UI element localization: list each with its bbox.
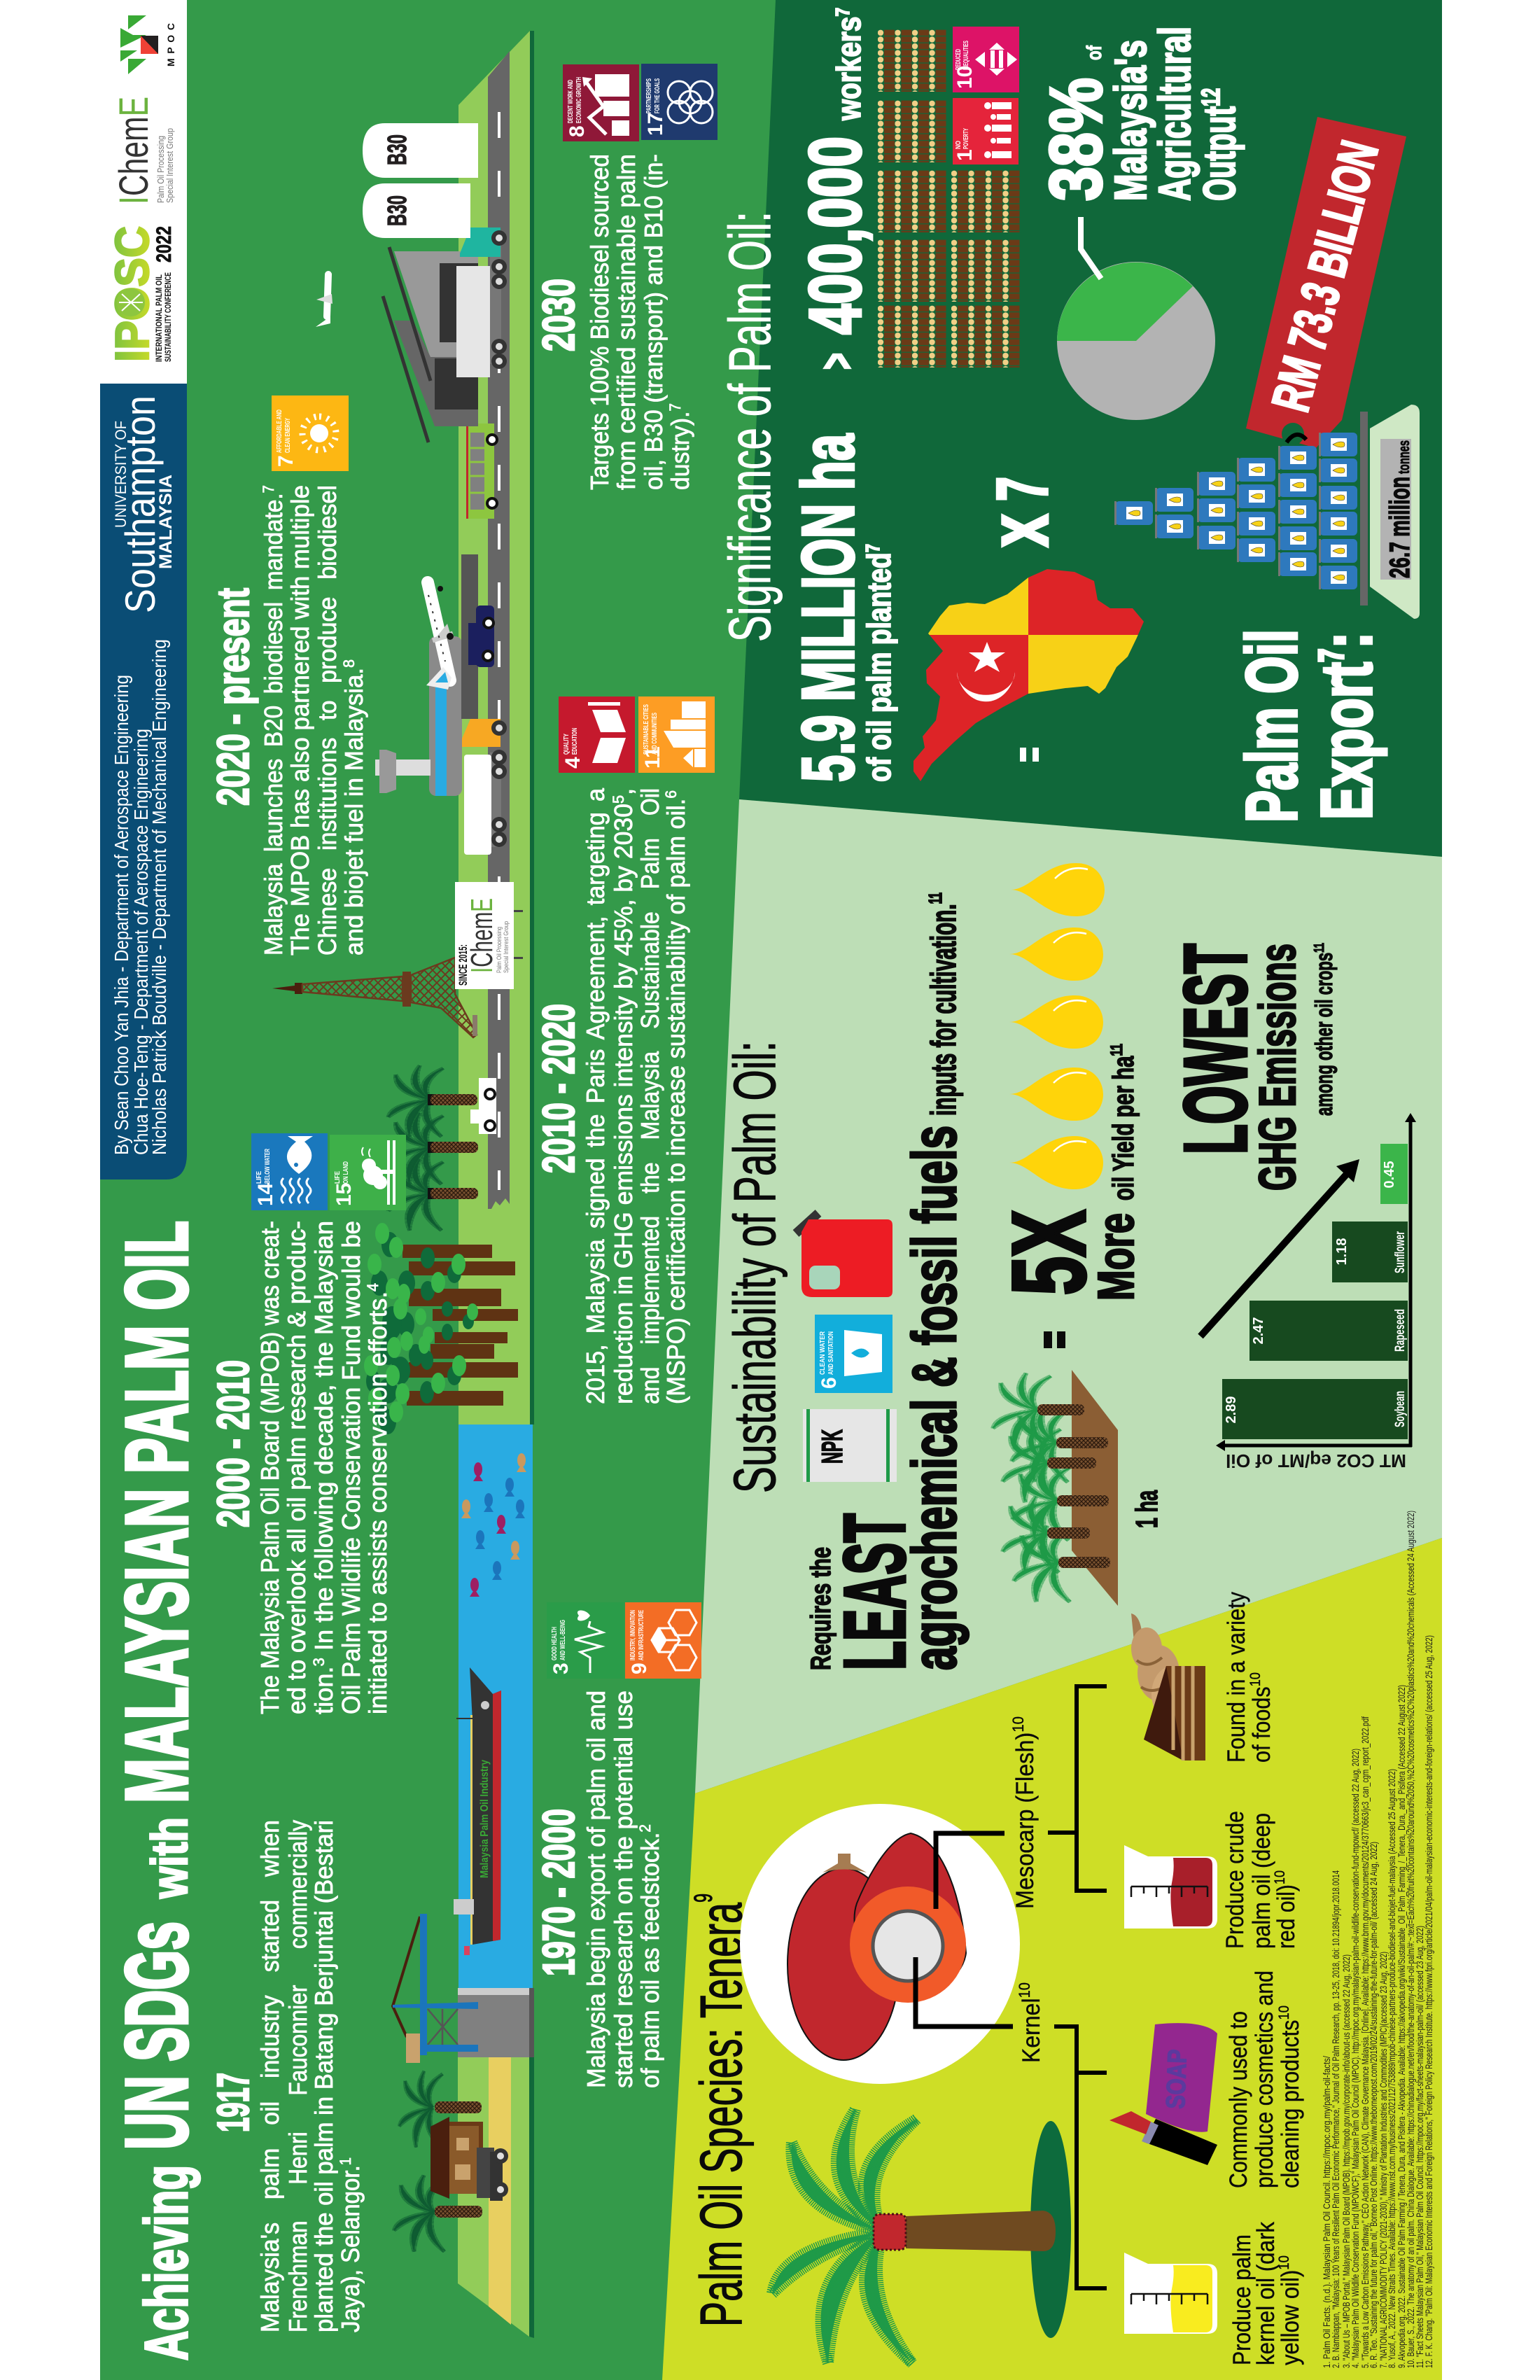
logo: IChemE: Special Interest Group (164, 128, 175, 203)
callout: price tag (1246, 117, 1406, 448)
chart: GHG emissions bar chart: Soybean (1393, 1391, 1408, 1427)
text: 1917 timeline entry: 1 (337, 2157, 354, 2165)
logo: IPOSC: SUSTAINABILITY CONFERENCE (163, 272, 173, 362)
text: 2030 timeline entry (533, 154, 694, 490)
text: food use (1223, 1592, 1275, 1763)
icon: SDG 3: AND WELL-BEING (559, 1620, 567, 1660)
text: references: 1. Palm Oil Facts. (n.d.). Malaysian Palm Oil Council. https://mpoc.org.my/palm-oil-facts/ (1322, 2056, 1332, 2368)
text: times seven: x (972, 514, 1065, 547)
text: 2000-2010 timeline entry: 3 (310, 1658, 328, 1667)
icon: pallet with tonnage: 26.7 million (1385, 477, 1415, 578)
chart: agricultural output pie (1057, 217, 1215, 420)
bracket: mesocarp uses (1048, 1686, 1107, 1891)
chart: GHG emissions bar chart: 0.45 (1382, 1161, 1397, 1188)
text: cosmetics use: produce cosmetics and (1251, 1970, 1278, 2188)
icon: equals sign (1044, 1331, 1065, 1348)
icon: SDG 15: LIFE (333, 1171, 342, 1184)
illustration: navy car (468, 606, 495, 667)
text: 1917 timeline entry: Jaya), Selangor. (336, 2150, 365, 2332)
icon: NPK bag: NPK (816, 1429, 848, 1464)
text: references: 8. Yusof, A., 2022. New Straits Times. Available: https://www.nst.com.my/business/2021/12/753889/mpob-chinese-partners-produce-biodiesel-and-biojet-fuel-malaysia (Accessed 25 August 2022) (1387, 1769, 1397, 2368)
logo: University of Southampton Malaysia: UNIVERSITY OF (112, 421, 130, 528)
stat: five times more oil yield: oil Yield per ha (1107, 993, 1140, 1200)
stat: five times more oil yield: 5X (992, 1210, 1107, 1295)
text: 2000-2010 timeline entry (208, 1221, 392, 1714)
heading: palm oil export: 7 (1312, 649, 1351, 662)
icon: SDG 6 (815, 1315, 892, 1393)
text: references: 10. Bauer, S., 2022. The anatomy of an oil palm. China Dialogue. Available: https://chinadialogue.net/en/food/the-anatomy-of-an-oil-palm/#:~:text=Each%20fruit%20contains%20around%2050,%2C%20cosmetics%2C%20plastics%20and%20chemicals (Accessed 24 August 2022) (1406, 1511, 1416, 2368)
heading: sustainability: Sustainability of Palm Oil: (722, 1041, 788, 1493)
logo: University of Southampton Malaysia: Southampton (117, 396, 164, 613)
text: 2000-2010 timeline entry: Oil Palm Wildlife Conservation Fund would be (337, 1221, 365, 1714)
illustration: one hectare of palms (993, 1370, 1118, 1606)
illustration: plane in sky (316, 274, 332, 327)
logo: University of Southampton Malaysia (112, 396, 176, 613)
title: UN SDGs (108, 1921, 206, 2150)
text: references: 7. "NATIONAL AGRICOMMODITY POLICY (2021-2030)," Ministry of Plantation Industries and Commodities (MPIC)(accessed 23 Aug, 2022) (1378, 1952, 1389, 2368)
stat: planted area (788, 433, 897, 782)
text: crude palm oil use: red oil) (1273, 1874, 1300, 1949)
icon: SDG 4: EDUCATION (570, 728, 579, 755)
text: 2010-2020 timeline entry: reduction in GHG emissions intensity by 45%, by 2030 (609, 797, 638, 1404)
stat: workers: 7 (832, 8, 853, 17)
text: crude palm oil use: 10 (1272, 1870, 1288, 1884)
icon: SDG 3: 3 (550, 1662, 573, 1674)
stat: five times more oil yield: 11 (1107, 1044, 1126, 1056)
text: 1970-2000 timeline entry: of palm oil as feedstock. (636, 1818, 664, 2088)
icon: SDG 7 (272, 396, 349, 471)
text: least agrochemical inputs (806, 892, 969, 1670)
illustration: tower (272, 958, 477, 1037)
icon: beaker of kernel oil (1124, 2253, 1217, 2334)
arrow: downward emissions trend (1200, 1159, 1359, 1336)
illustration: airplane on runway (426, 582, 454, 690)
text: 2030 timeline entry: 7 (666, 403, 684, 411)
text: authors: Chua Hoe-Teng - Department of Aerospace Engineering (130, 729, 152, 1155)
illustration: palm fruit cross-section (740, 1804, 1020, 2084)
text: 2030 timeline entry: oil, B30 (transport) and B10 (in- (639, 154, 668, 490)
illustration: oil palm plantation (364, 1223, 518, 1434)
stat: planted area: 5.9 MILLION ha (788, 433, 869, 782)
illustration: airport terminal and tower (375, 554, 478, 796)
text: 2020-present timeline entry: 7 (260, 485, 277, 493)
illustration: palm tree (772, 2109, 1071, 2363)
text: 2000-2010 timeline entry: 4 (364, 1283, 382, 1292)
illustration: palm trees by the house (394, 2071, 482, 2251)
road (488, 51, 510, 1209)
text: references: 11. "Fact Sheets Malaysian Palm Oil," Malaysian Palm Oil Council. https://mpoc.org.my/fact-sheets-malaysian-palm-oil/ (accessed 23 Aug, 2022) (1415, 1926, 1425, 2368)
text: cosmetics use: cleaning products (1277, 1996, 1304, 2188)
text: 2030 timeline entry: from certified sustainable palm (612, 154, 640, 490)
heading: palm oil export (1231, 629, 1387, 822)
illustration: old truck (477, 2148, 508, 2201)
icon: SDG 1 (953, 98, 1018, 164)
icon: SDG 6: CLEAN WATER (818, 1331, 827, 1375)
icon: SDG 7: CLEAN ENERGY (284, 418, 292, 453)
panel: palm oil species Tenera (688, 1511, 1434, 2368)
icon: NPK bag (803, 1409, 897, 1482)
text: 2020-present timeline entry: 2020 - present (208, 588, 258, 806)
chart: GHG emissions bar chart: 1.18 (1334, 1238, 1350, 1265)
text: 2000-2010 timeline entry: The Malaysia Palm Oil Board (MPOB) was creat- (255, 1221, 284, 1714)
text: crude palm oil use (1222, 1811, 1300, 1949)
icon: SDG 7: AFFORDABLE AND (275, 410, 284, 453)
icon: SDG 11: 11 (641, 746, 664, 769)
icon: equals sign (1020, 748, 1039, 762)
title: Achieving (133, 2165, 200, 2360)
illustration: IChemE billboard: Special Interest Group (503, 921, 510, 973)
illustration: tanker ship (454, 1667, 501, 1955)
icon: SDG 14: BELOW WATER (263, 1149, 272, 1184)
text: 2030 timeline entry: 2030 (533, 279, 584, 351)
chart: GHG emissions bar chart: 2.47 (1251, 1317, 1266, 1344)
illustration: B30 silos (363, 123, 478, 238)
logo: MPOC: M P O C (165, 23, 176, 66)
icon: SDG 10: 10 (953, 66, 976, 89)
illustration: green bus (466, 424, 498, 519)
text: kernel oil use: yellow oil) (1277, 2258, 1304, 2365)
text: least agrochemical inputs: Requires the (806, 1547, 836, 1670)
logo: IPOSC: IPOSC (106, 226, 159, 362)
chart: GHG emissions bar chart: 2.89 (1224, 1396, 1239, 1423)
text: lowest GHG emissions: LOWEST (1166, 944, 1265, 1154)
chart: GHG emissions bar chart (1216, 1113, 1416, 1471)
illustration: three palm trees (388, 1065, 478, 1231)
label: kernel: 10 (1016, 1982, 1033, 1998)
logo: IPOSC: INTERNATIONAL PALM OIL (154, 274, 164, 362)
logo: IPOSC: 2022 (153, 226, 176, 262)
illustration: lorry (456, 227, 507, 377)
icon: five oil drops (1009, 863, 1105, 1189)
text: references: 6. R. Teo. "Sustaining the future for palm oil," Borneo Post Online. https://www.theborneopost.com/2019/02/24/sustaining-the-future-for-palm-oil/ (accessed 24 Aug, 2022) (1368, 1842, 1379, 2368)
illustration: wooden house (430, 2117, 483, 2199)
text: 1970-2000 timeline entry: Malaysia begin export of palm oil and (582, 1690, 610, 2088)
icon: SDG 15: ON LAND (342, 1161, 350, 1184)
icon: oil drums pyramid (1114, 433, 1357, 589)
text: least agrochemical inputs: inputs for cultivation. (924, 760, 963, 1116)
text: kernel oil use (1228, 2222, 1304, 2365)
text: one hectare: 1 ha (1130, 1490, 1164, 1528)
stat: five times more oil yield: More (1088, 1213, 1144, 1301)
text: 2010-2020 timeline entry: 2015, Malaysia signed the Paris Agreement, targeting a (581, 788, 610, 1404)
panel: significance dark green background (739, 0, 1442, 857)
text: 1970-2000 timeline entry: 2 (636, 1824, 654, 1833)
text: 2010-2020 timeline entry: and implemented the Malaysia Sustainable Palm Oil (636, 788, 664, 1404)
text: 1917 timeline entry: Malaysia's palm oil industry started when (255, 1820, 284, 2332)
text: crude palm oil use: palm oil (deep (1248, 1813, 1275, 1949)
text: 2000-2010 timeline entry: initiated to assists conservation efforts. (363, 1282, 392, 1714)
heading: Tenera: 9 (689, 1893, 718, 1903)
text: cosmetics use: 10 (1276, 2005, 1292, 2019)
text: 2010-2020 timeline entry: 6 (662, 790, 680, 799)
icon: SDG 7: 7 (274, 455, 298, 467)
text: 2030 timeline entry: dustry). (666, 406, 694, 490)
illustration: IChemE billboard: SINCE 2015: (456, 944, 470, 986)
heading: palm oil export: Export (1306, 592, 1387, 820)
logo: IChemE (111, 97, 175, 204)
illustration: IChemE billboard: Palm Oil Processing (496, 927, 503, 973)
heading: palm oil export: Palm Oil (1231, 629, 1312, 822)
icon: fuel jerrycan (796, 1213, 892, 1297)
text: food use: Found in a variety (1223, 1592, 1250, 1763)
illustration: road scene (272, 31, 534, 2338)
text: times seven (972, 477, 1065, 547)
label: kernel: Kernel (1018, 1992, 1045, 2063)
text: lowest GHG emissions: GHG Emissions (1250, 944, 1306, 1191)
text: lowest GHG emissions (1166, 943, 1338, 1191)
text: lowest GHG emissions: 11 (1312, 943, 1327, 953)
icon: SDG 1: NO (954, 141, 962, 149)
illustration: jetty (458, 1988, 534, 2057)
stat: agricultural share: 12 (1196, 88, 1225, 106)
text: 2020-present timeline entry: Chinese institutions to produce biodiesel (313, 485, 342, 955)
icon: SDG 11 (638, 696, 715, 773)
icon: SDG 4 (559, 696, 635, 773)
icon: SDG 4: QUALITY (562, 734, 570, 755)
chart: GHG emissions bar chart: Rapeseed (1393, 1309, 1408, 1352)
text: 2010-2020 timeline entry: , (609, 788, 638, 795)
text: 1917 timeline entry (208, 1820, 365, 2332)
icon: worker grid (878, 29, 1020, 368)
text: kernel oil use: 10 (1276, 2255, 1292, 2270)
heading: palm oil export: : (1306, 632, 1387, 649)
text: least agrochemical inputs: 11 (925, 892, 946, 904)
icon: SDG 17: 17 (644, 113, 667, 136)
chart: GHG emissions bar chart: Sunflower (1393, 1231, 1408, 1273)
label: mesocarp: 10 (1009, 1716, 1027, 1732)
icon: SDG 17: PARTNERSHIPS (645, 78, 653, 113)
icon: Selangor map flag (910, 560, 1147, 785)
icon: beaker of crude palm oil (1124, 1845, 1217, 1928)
text: least agrochemical inputs: agrochemical & fossil fuels (899, 1126, 969, 1670)
icon: SDG 1: 1 (953, 149, 976, 161)
icon: SDG 6: 6 (818, 1377, 841, 1389)
logo: University of Southampton Malaysia: MALAYSIA (156, 475, 176, 569)
panel: significance of palm oil (717, 8, 1420, 822)
label: mesocarp: Mesocarp (Flesh) (1011, 1718, 1039, 1909)
icon: SDG 15 (330, 1135, 406, 1210)
icon: SDG 3: GOOD HEALTH (550, 1627, 559, 1660)
logo: MPOC (120, 15, 176, 74)
icon: SDG 8: DECENT WORK AND (566, 80, 575, 123)
text: lowest GHG emissions: among other oil crops (1311, 866, 1338, 1116)
illustration: IChemE billboard (455, 882, 523, 989)
icon: SDG 9: 9 (628, 1662, 651, 1674)
text: crude palm oil use: Produce crude (1222, 1811, 1249, 1949)
panel: sustainability light green background (695, 799, 1442, 1793)
icon: soap bar and lipstick: SOAP (1161, 2049, 1193, 2109)
icon: SDG 6: AND SANITATION (827, 1331, 835, 1375)
stat: agricultural share (1035, 27, 1245, 201)
illustration: IChemE billboard: IChemE (465, 898, 499, 973)
panel: sustainability of palm oil (722, 863, 1416, 1670)
stat: workers: > (809, 353, 864, 370)
text: 1917 timeline entry: planted the oil palm in Batang Berjuntai (Bestari (309, 1820, 338, 2332)
bracket: kernel uses (1054, 2026, 1107, 2288)
road bank (458, 31, 530, 1424)
stat: workers: 400,000 (794, 136, 876, 335)
stat: planted area: of oil palm planted (860, 491, 897, 782)
text: references: 2. B. Nambiappan, "Malaysia: 100 Years of Resilient Palm Oil Economic Performance," Journal of Oil Palm Research, pp. 13-25, 2018, doi: 10.21894/jopr.2018.0014 (1331, 1870, 1341, 2368)
icon: SDG 9: AND INFRASTRUCTURE (637, 1610, 645, 1660)
text: 2010-2020 timeline entry: 2010 - 2020 (533, 1004, 584, 1173)
text: kernel oil use: Produce palm (1228, 2234, 1256, 2365)
illustration: white pickup (470, 1078, 496, 1134)
icon: SDG 4: 4 (561, 757, 584, 769)
icon: SDG 10: REDUCED (954, 49, 962, 70)
illustration: B30 silos: B30 (383, 195, 412, 226)
text: least agrochemical inputs: LEAST (827, 1513, 923, 1670)
illustration: tanker truck (460, 719, 507, 855)
illustration: tanker ship: Malaysia Palm Oil Industry (479, 1760, 491, 1878)
icon: SDG 10 (953, 27, 1019, 92)
title (108, 1221, 206, 2360)
text: food use: 10 (1247, 1672, 1264, 1686)
text: 1970-2000 timeline entry: 1970 - 2000 (533, 1809, 584, 1976)
icon: soap bar and lipstick (1110, 2023, 1217, 2165)
text: references: 4. "Malaysian Palm Oil Wildlife Conservation Fund (MPOWCF)," Malaysian Palm Oil Council (MPOC). http://mpoc.org.my/malaysian-palm-oil-wildlife-conservation-fund-mpowcf/ (accessed 22 Aug, 2022) (1350, 1749, 1361, 2368)
stat: agricultural share: of (1083, 45, 1106, 60)
icon: SDG 3 (547, 1602, 624, 1679)
title: MALAYSIAN PALM OIL (108, 1221, 206, 1803)
icon: ice cream and cake (1131, 1614, 1205, 1760)
stat: five times more oil yield (992, 1044, 1144, 1301)
icon: SDG 1: POVERTY (962, 128, 970, 149)
text: references (1322, 1511, 1434, 2368)
text: authors: Nicholas Patrick Boudville - Department of Mechanical Engineering (148, 639, 170, 1155)
icon: SDG 17 (641, 64, 718, 140)
icon: SDG 10: INEQUALITIES (962, 41, 970, 70)
text: references: 9. Akvopedia.org, 2022. Sustainable Oil Palm Farming / Tenera, Dura, and Pisifera - Akvopedia. Available: https://akvopedia.org/wiki/Sustainable_Oil_Palm_Farming_/_Tenera,_Dura,_and_Pisifera (Accessed 22 August 2022) (1396, 1685, 1407, 2368)
text: 2020-present timeline entry: The MPOB has also partnered with multiple (286, 485, 314, 955)
icon: SDG 14: 14 (254, 1182, 277, 1206)
text: food use: of foods (1248, 1675, 1275, 1763)
text: references: 5. "Towards a Low Carbon Emissions Pathway," CEO Action Network (CAN), Climate Governance Malaysia. [Online]. Available: https://www.bnm.gov.my/documents/20124/3770663/jc3_can_cgm_report_2022.pdf (1360, 1716, 1371, 2368)
icon: pallet with tonnage (1360, 405, 1420, 619)
illustration: factory building (383, 247, 478, 442)
callout: price tag: RM 73.3 BILLION (1261, 135, 1390, 417)
text: 2010-2020 timeline entry: 5 (610, 795, 627, 804)
text: 2020-present timeline entry: 8 (340, 659, 358, 668)
stat: agricultural share: 38% (1035, 78, 1117, 201)
text: 1970-2000 timeline entry: started research on the potential use (609, 1690, 638, 2088)
text: times seven: 7 (982, 477, 1063, 501)
logo: IChemE: IChemE (111, 97, 157, 204)
stat: planted area: 7 (862, 544, 883, 552)
text: 2010-2020 timeline entry: (MSPO) certification to increase sustainability of palm oil. (662, 769, 690, 1404)
illustration: crane (393, 1914, 478, 2063)
icon: SDG 14 (251, 1133, 328, 1210)
text: 2000-2010 timeline entry: tion. (309, 1667, 338, 1714)
text: 1970-2000 timeline entry (533, 1690, 664, 2088)
icon: SDG 8 (563, 64, 639, 141)
icon: pallet with tonnage: tonnes (1395, 440, 1413, 474)
icon: SDG 11: SUSTAINABLE CITIES (642, 704, 650, 755)
text: cosmetics use: Commonly used to (1225, 2011, 1252, 2188)
illustration: B30 silos: B30 (383, 134, 412, 165)
stat: agricultural share: Output (1194, 54, 1245, 201)
icon: SDG 15: 15 (332, 1183, 356, 1206)
panel: species yellow background (662, 1538, 1442, 2380)
illustration: water with fish (458, 1424, 533, 1988)
text: authors: By Sean Choo Yan Jhia - Department of Aerospace Engineering (111, 675, 132, 1155)
icon: SDG 17: FOR THE GOALS (653, 78, 662, 113)
logo: IChemE: Palm Oil Processing (155, 136, 166, 203)
text: 2000-2010 timeline entry: 2000 - 2010 (208, 1360, 258, 1527)
icon: SDG 9 (625, 1602, 701, 1679)
heading: significance: Significance of Palm Oil: (717, 211, 783, 642)
text: 1917 timeline entry: Frenchman Henri Fauconnier commercially (284, 1820, 312, 2332)
panel: authors and Southampton logo (100, 384, 187, 1180)
title: with (142, 1817, 198, 1899)
icon: SDG 8: ECONOMIC GROWTH (575, 77, 583, 123)
text: 1917 timeline entry: 1917 (208, 2073, 258, 2132)
text: references: 12. F. K. Chang. "Palm Oil: Malaysian Economic Interests and Foreign Relations," Foreign Policy Research Institute. https://www.fpri.org/article/2021/04/palm-oil-malaysian-economic-interests-and-foreign-relations/ (accessed 25 Aug, 2022) (1424, 1635, 1434, 2368)
text: kernel oil use: kernel oil (dark (1252, 2222, 1280, 2365)
illustration: sand road (489, 2037, 511, 2325)
icon: SDG 14: LIFE (255, 1171, 263, 1184)
icon: SDG 11: AND COMMUNITIES (650, 713, 659, 755)
text: references: 3. "About Us – MPOB Portal," Malaysian Palm Oil Board (MPOB). https://mpob.gov.my/corporate-info/about-us (accessed 22 Aug, 2022) (1341, 1954, 1352, 2368)
chart: GHG emissions bar chart: MT CO2 eq/MT of Oil (1226, 1450, 1406, 1471)
text: 2020-present timeline entry (208, 485, 368, 955)
text: 2020-present timeline entry: Malaysia launches B20 biodiesel mandate. (259, 456, 288, 955)
text: 2000-2010 timeline entry: In the following decade, the Malaysian (309, 1221, 338, 1658)
panel: white logo header (100, 0, 187, 384)
text: 2010-2020 timeline entry (533, 788, 690, 1404)
text: 2000-2010 timeline entry: ed to overlook all oil palm research & produc- (282, 1221, 311, 1714)
text: authors (111, 639, 170, 1155)
text: cosmetics use (1225, 1970, 1304, 2188)
text: 2030 timeline entry: Targets 100% Biodiesel sourced (585, 154, 614, 490)
text: 2020-present timeline entry: and biojet fuel in Malaysia. (340, 659, 368, 955)
heading: Tenera: Palm Oil Species: Tenera (688, 1667, 754, 2327)
icon: SDG 8: 8 (566, 125, 589, 137)
icon: SDG 9: INDUSTRY, INNOVATION (629, 1610, 637, 1660)
